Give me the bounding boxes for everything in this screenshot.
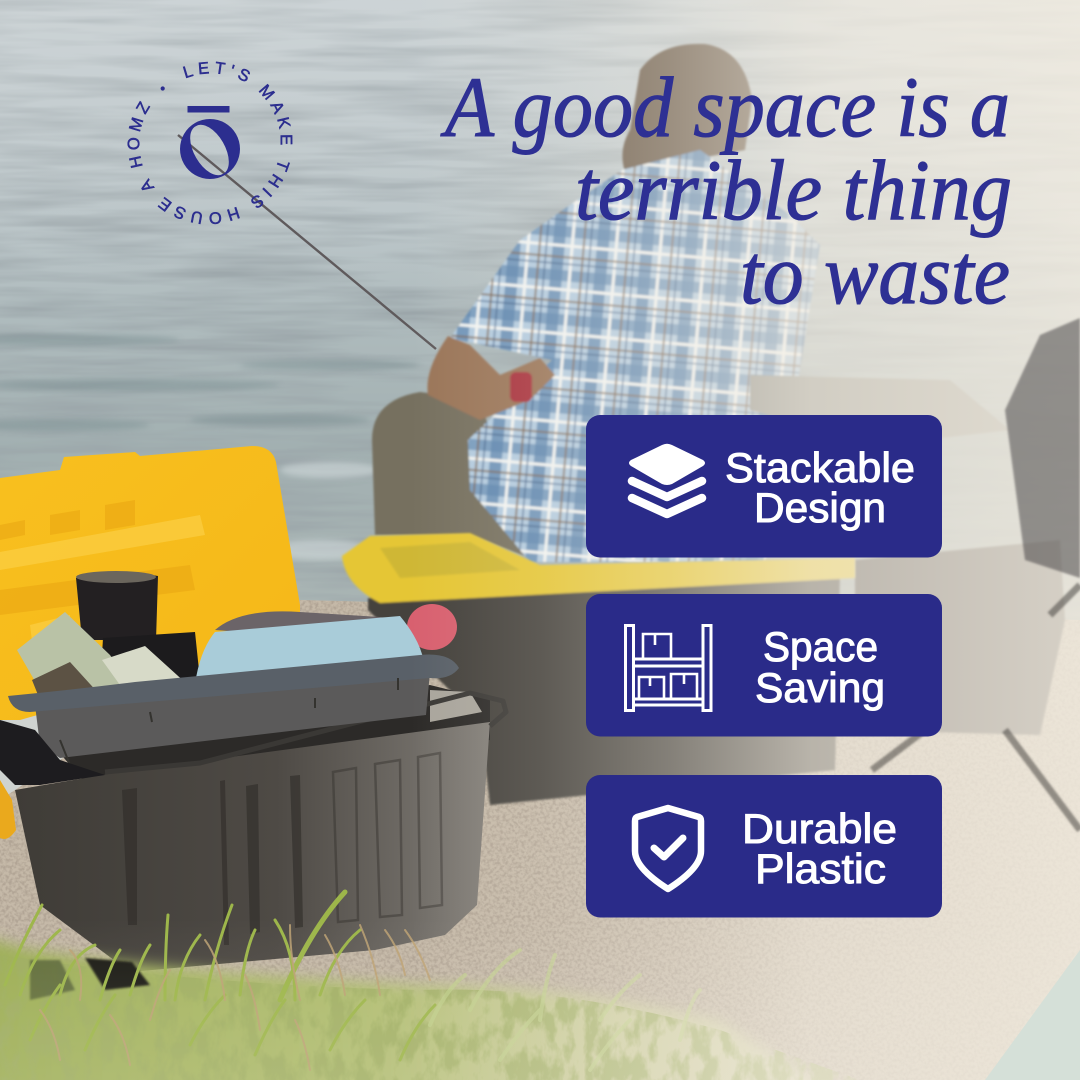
upper tray (8, 655, 459, 770)
title: A good space is a (440, 59, 1010, 155)
contents of tray (17, 611, 424, 700)
label (725, 444, 915, 531)
logo dot (161, 86, 165, 91)
panel: stackable design (586, 415, 942, 558)
icon: shield with check (635, 808, 701, 889)
logo: Let's make this house a Homz (127, 62, 292, 224)
yellow lid (0, 446, 300, 720)
title: terrible thing (575, 142, 1012, 238)
chair fabric base (750, 375, 1065, 735)
label: Saving (755, 664, 885, 711)
teal corner (985, 950, 1080, 1080)
back storage tote (342, 533, 855, 805)
title: to waste (740, 226, 1010, 322)
man fishing (372, 44, 820, 562)
logo letter o (180, 119, 240, 179)
grass (0, 892, 880, 1080)
icon: stacked layers (629, 444, 705, 514)
label: Design (754, 484, 886, 531)
icon: warehouse shelf with boxes (626, 626, 711, 710)
red speaker (407, 604, 457, 650)
panel: space saving (586, 594, 942, 736)
lower storage bin (15, 685, 506, 972)
yellow handle piece (0, 780, 16, 839)
panel: durable plastic (586, 775, 942, 918)
dark strap (0, 720, 105, 785)
label: Stackable (725, 444, 915, 491)
fishing rod (178, 135, 436, 349)
label: Durable (742, 805, 897, 852)
forearm (427, 336, 555, 420)
lake water (0, 0, 1080, 640)
black can (76, 571, 158, 640)
reel (510, 372, 532, 402)
logo circular text: LET'S MAKE THIS HOUSE A HOMZ (127, 62, 292, 224)
neck and head (622, 44, 752, 172)
label: Plastic (755, 845, 886, 892)
label: Space (763, 623, 878, 670)
shorts (372, 392, 530, 558)
shirt (450, 150, 820, 562)
logo bar (188, 106, 230, 112)
folding chair frame (872, 318, 1080, 830)
sandy shore (0, 600, 1080, 1080)
title (440, 59, 1012, 322)
label (742, 805, 897, 892)
label (755, 623, 885, 711)
